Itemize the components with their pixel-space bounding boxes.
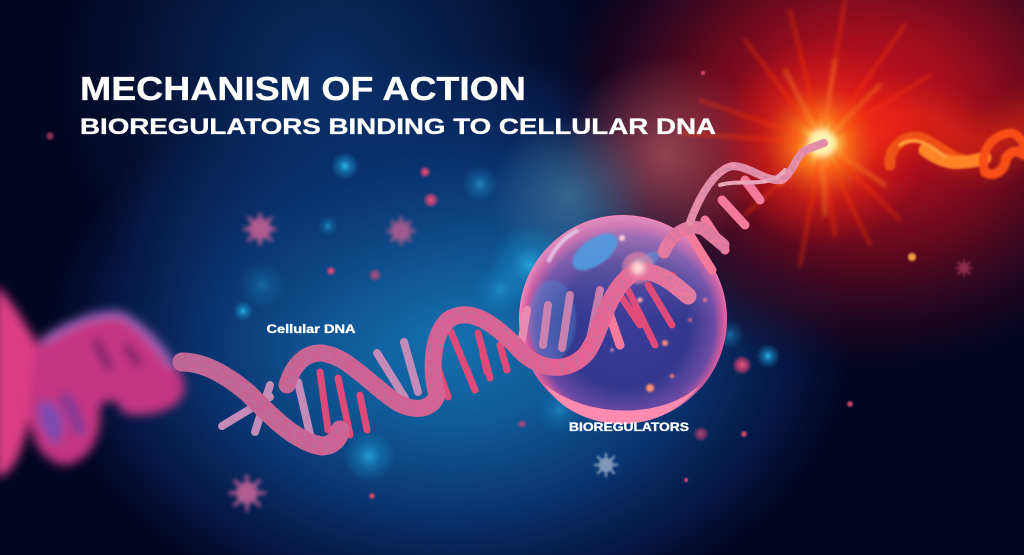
red energy burst bbox=[680, 0, 930, 265]
red helix fragment at right edge bbox=[880, 119, 1024, 174]
heading line 2: BIOREGULATORS BINDING TO CELLULAR DNA bbox=[80, 114, 716, 139]
rungs bbox=[222, 180, 760, 443]
blurred foreground DNA end bbox=[0, 285, 185, 478]
DNA helix bbox=[182, 143, 824, 446]
molecule: lower left bbox=[230, 476, 264, 510]
bioregulators sphere bbox=[519, 215, 727, 424]
strands bbox=[182, 143, 824, 446]
molecule: right red bbox=[956, 260, 972, 276]
heading line 1: MECHANISM OF ACTION bbox=[80, 71, 526, 108]
pink particles and star molecules bbox=[45, 70, 972, 510]
molecule: bottom blue-grey bbox=[595, 454, 617, 476]
label: Bioregulators: BIOREGULATORS bbox=[569, 420, 689, 434]
glowing blue particles bbox=[233, 152, 780, 482]
title bbox=[80, 71, 716, 139]
sphere highlights bbox=[528, 226, 707, 392]
label: Cellular DNA: Cellular DNA bbox=[266, 322, 356, 336]
molecule: upper centre bbox=[388, 218, 414, 244]
molecule: upper left bbox=[245, 214, 275, 244]
glow on helix bbox=[631, 261, 645, 275]
